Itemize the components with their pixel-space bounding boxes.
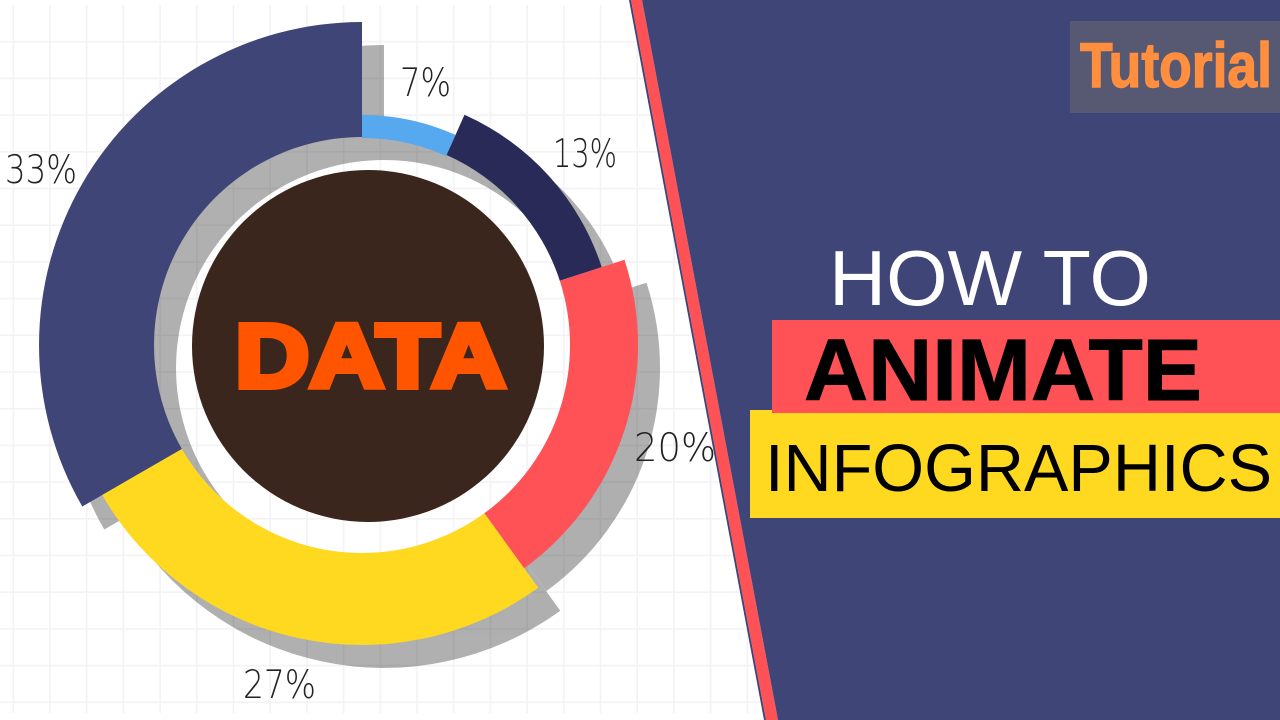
segment: 20% red (484, 260, 638, 568)
navy panel background (642, 0, 1280, 720)
label: 33%: 33% (5, 148, 77, 193)
red diagonal stripe (631, 0, 778, 720)
right panel (629, 0, 1280, 720)
segment: 33% navy (39, 22, 362, 506)
label: 20%: 20% (634, 426, 716, 471)
yellow band: INFOGRAPHICS (750, 410, 1280, 518)
band background (750, 410, 1280, 518)
segment: 27% yellow (102, 449, 538, 645)
tutorial badge (1070, 21, 1280, 113)
label: 7%: 7% (400, 61, 451, 106)
centre circle (192, 170, 544, 522)
donut chart (39, 22, 660, 668)
label: 13%: 13% (553, 132, 617, 177)
badge background (1070, 21, 1280, 113)
red band: ANIMATE (772, 320, 1280, 419)
segment: 13% dark navy (447, 115, 602, 281)
band background (772, 320, 1280, 413)
heading: HOW TO: HOW TO (829, 234, 1151, 322)
band text: ANIMATE (804, 322, 1202, 419)
centre label: DATA: DATA (235, 307, 506, 407)
panel edge line (629, 0, 766, 720)
label: 27%: 27% (243, 663, 316, 708)
segment: 7% light blue (362, 115, 456, 156)
chart shadow (61, 45, 660, 668)
band text: INFOGRAPHICS (765, 431, 1272, 506)
